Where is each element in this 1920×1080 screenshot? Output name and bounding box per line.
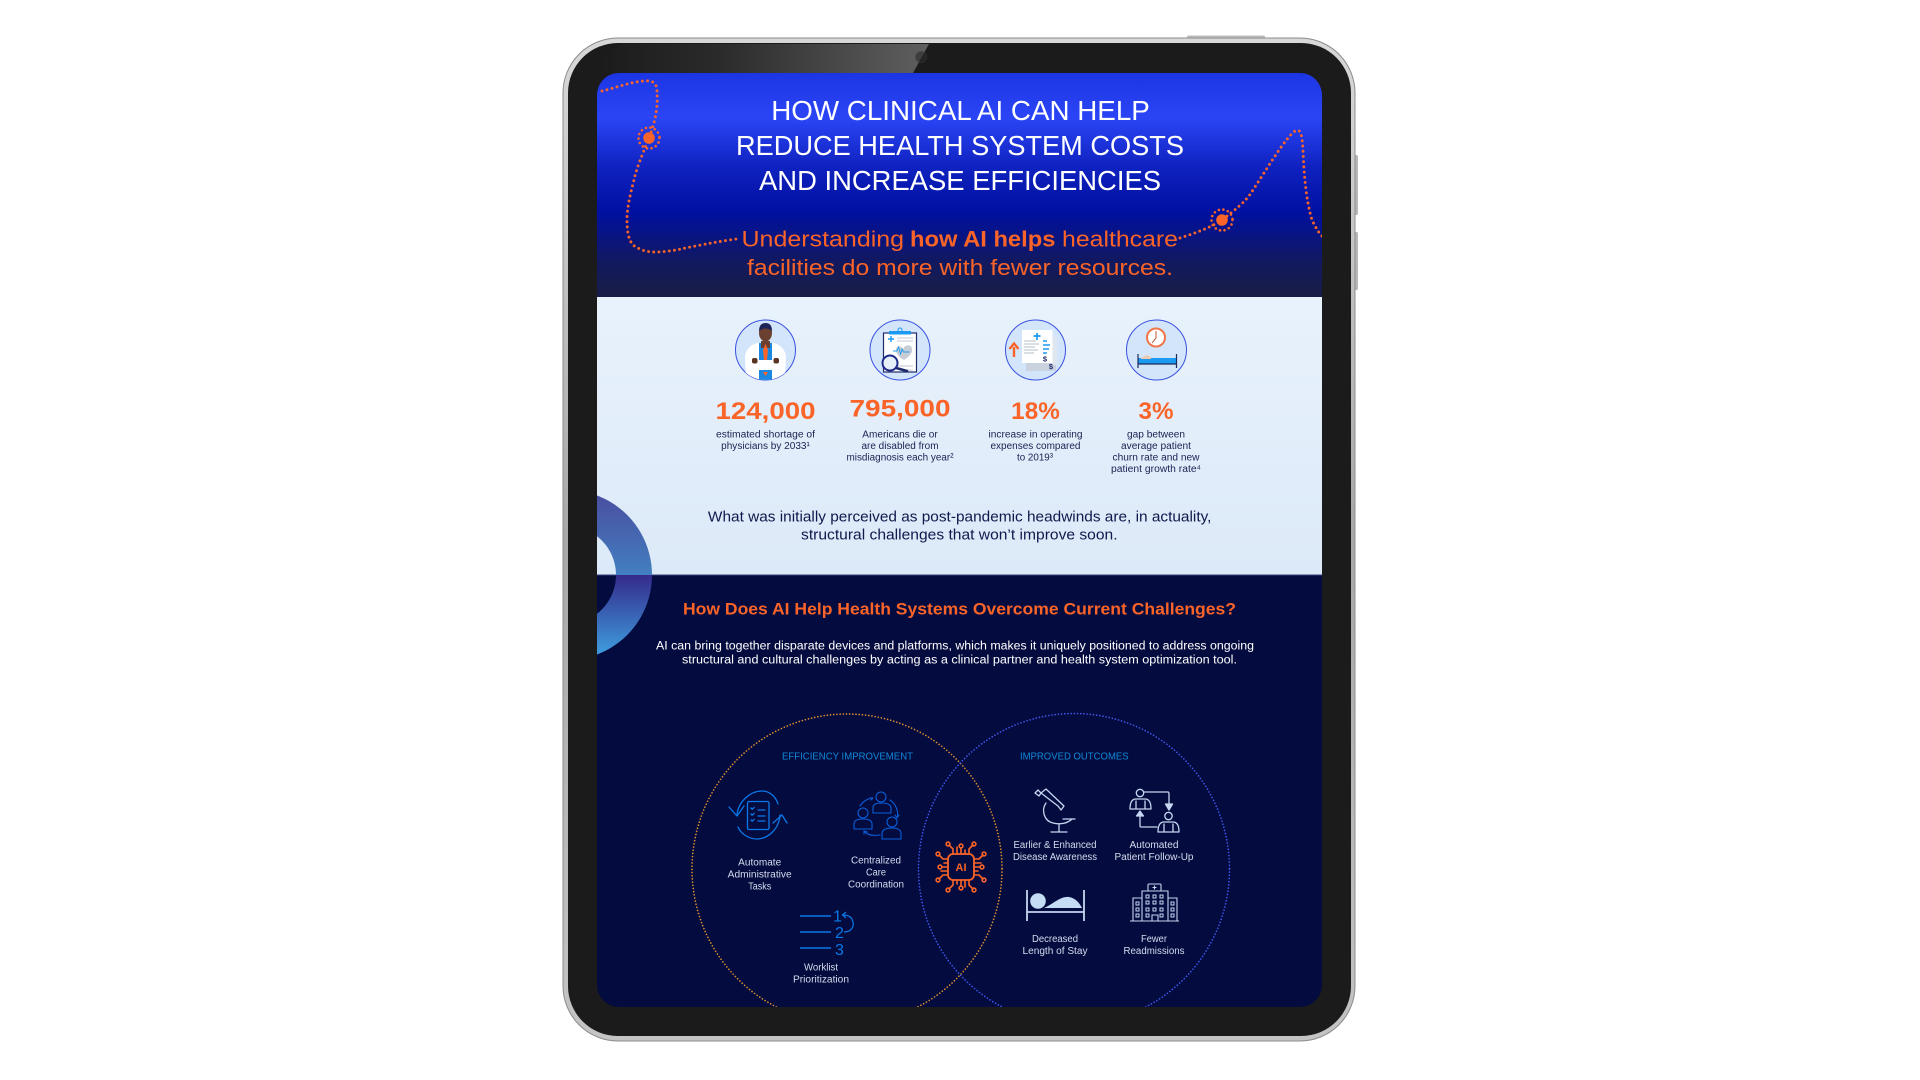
decorative ring bbox=[597, 496, 652, 654]
item: worklist prioritization bbox=[793, 908, 853, 986]
caption: Tasks bbox=[748, 882, 771, 892]
icon: care team cycle bbox=[854, 792, 901, 839]
icon: AI chip bbox=[936, 842, 986, 892]
description bbox=[989, 430, 1082, 460]
item: automate tasks bbox=[728, 791, 792, 892]
caption: Disease Awareness bbox=[1013, 852, 1097, 863]
bezel glare bbox=[600, 44, 929, 73]
node left bbox=[638, 128, 660, 148]
caption: Length of Stay bbox=[1022, 946, 1088, 957]
intro text: AI can bring together disparate devices and platforms, which makes it uniquely positioned to address ongoing bbox=[656, 640, 1254, 652]
icon: rising expenses: $ bbox=[1049, 362, 1054, 371]
stat: physician shortage bbox=[716, 320, 816, 452]
number: 795,000 bbox=[850, 396, 950, 423]
tablet bezel bbox=[568, 43, 1351, 1036]
description: physicians by 2033¹ bbox=[721, 441, 811, 452]
stat: operating expenses bbox=[988, 320, 1082, 464]
dotted journey line right bbox=[1180, 130, 1322, 238]
caption: Readmissions bbox=[1124, 946, 1184, 957]
tablet device frame bbox=[563, 36, 1358, 1041]
caption: Earlier & Enhanced bbox=[1014, 840, 1096, 851]
title: HOW CLINICAL AI CAN HELP bbox=[771, 95, 1150, 126]
subtitle: healthcare bbox=[1062, 227, 1178, 252]
description: churn rate and new bbox=[1112, 452, 1200, 464]
description: expenses compared bbox=[990, 441, 1080, 452]
caption bbox=[793, 962, 849, 986]
number: 124,000 bbox=[716, 398, 816, 425]
venn circle: outcomes bbox=[918, 714, 1230, 1024]
venn circle: efficiency bbox=[692, 714, 1002, 1024]
subtitle: facilities do more with fewer resources. bbox=[747, 255, 1173, 280]
description: estimated shortage of bbox=[716, 430, 815, 440]
tablet side buttons bbox=[1353, 155, 1358, 290]
item: centralized care bbox=[848, 792, 904, 890]
icon: rising expenses bbox=[1006, 320, 1066, 380]
title: REDUCE HEALTH SYSTEM COSTS bbox=[736, 130, 1184, 161]
description: increase in operating bbox=[988, 430, 1082, 440]
caption bbox=[1022, 934, 1088, 957]
caption bbox=[1124, 934, 1184, 957]
panel: statistics bbox=[597, 297, 1322, 575]
stat: misdiagnosis bbox=[846, 320, 954, 464]
icon: clipboard and magnifier bbox=[870, 320, 930, 380]
item: length of stay bbox=[1022, 890, 1088, 957]
heading: How Does AI Help Health Systems Overcome Current Challenges? bbox=[683, 600, 1236, 618]
panel: header bbox=[597, 73, 1322, 297]
caption: Coordination bbox=[848, 880, 904, 890]
description: Americans die or bbox=[862, 430, 938, 440]
label: efficiency improvement: EFFICIENCY IMPROVEMENT bbox=[782, 750, 914, 762]
description: gap between bbox=[1127, 430, 1185, 440]
caption: Automate bbox=[738, 858, 782, 868]
intro text bbox=[656, 640, 1254, 666]
label: improved outcomes: IMPROVED OUTCOMES bbox=[1020, 750, 1129, 762]
caption: Care bbox=[866, 868, 886, 878]
caption bbox=[1013, 840, 1097, 863]
tablet outer rim bbox=[563, 38, 1355, 1041]
summary statement: structural challenges that won’t improve soon. bbox=[801, 528, 1118, 544]
dotted journey line left bbox=[602, 81, 736, 252]
caption: Fewer bbox=[1141, 934, 1168, 945]
stat: patient churn bbox=[1111, 320, 1201, 475]
description: misdiagnosis each year² bbox=[846, 452, 954, 464]
icon: doctor bbox=[736, 320, 796, 383]
node right bbox=[1212, 210, 1232, 230]
description: average patient bbox=[1121, 441, 1191, 452]
caption bbox=[728, 858, 792, 890]
description bbox=[846, 430, 954, 464]
caption: Prioritization bbox=[793, 974, 849, 986]
tablet top button bbox=[1187, 36, 1265, 40]
subtitle bbox=[743, 230, 1177, 275]
number: 3% bbox=[1138, 398, 1174, 425]
camera bbox=[916, 52, 926, 62]
panel: how AI helps bbox=[597, 496, 1322, 1007]
caption: Administrative bbox=[728, 870, 792, 880]
title bbox=[738, 100, 1183, 190]
icon: reordered list: 1 bbox=[833, 908, 842, 926]
caption: Automated bbox=[1130, 840, 1178, 851]
caption: Decreased bbox=[1032, 934, 1078, 945]
description: are disabled from bbox=[862, 441, 938, 452]
intro text: structural and cultural challenges by acting as a clinical partner and health system optimization tool. bbox=[682, 654, 1237, 666]
caption bbox=[1114, 840, 1194, 863]
caption: Worklist bbox=[804, 962, 838, 974]
caption bbox=[848, 856, 904, 888]
caption: Centralized bbox=[851, 856, 901, 866]
subtitle: Understanding bbox=[742, 227, 904, 252]
caption: Patient Follow-Up bbox=[1114, 852, 1194, 863]
icon: hospital bbox=[1130, 884, 1179, 921]
screen bbox=[597, 73, 1322, 1007]
icon: follow-up loop bbox=[1130, 789, 1179, 832]
icon: patient in bed bbox=[1027, 890, 1084, 921]
summary statement bbox=[708, 510, 1211, 544]
description bbox=[1111, 430, 1201, 475]
icon: clock and bed bbox=[1126, 320, 1186, 380]
icon: reordered list: 3 bbox=[835, 942, 844, 959]
number: 18% bbox=[1011, 398, 1060, 425]
item: fewer readmissions bbox=[1124, 884, 1184, 957]
description: patient growth rate⁴ bbox=[1111, 464, 1201, 475]
description: to 2019³ bbox=[1017, 452, 1054, 464]
icon: rising expenses: $ bbox=[1043, 354, 1048, 364]
summary statement: What was initially perceived as post-pandemic headwinds are, in actuality, bbox=[708, 510, 1211, 526]
icon: checklist with cycle arrows bbox=[729, 791, 787, 839]
item: disease awareness bbox=[1013, 789, 1097, 863]
icon: microscope bbox=[1035, 789, 1075, 832]
description bbox=[716, 430, 815, 452]
subtitle: how AI helps bbox=[910, 227, 1055, 252]
item: patient follow-up bbox=[1114, 789, 1194, 863]
icon: AI chip: AI bbox=[956, 862, 966, 874]
icon: reordered list bbox=[800, 908, 853, 959]
title: AND INCREASE EFFICIENCIES bbox=[759, 165, 1161, 196]
icon: reordered list: 2 bbox=[835, 925, 844, 942]
